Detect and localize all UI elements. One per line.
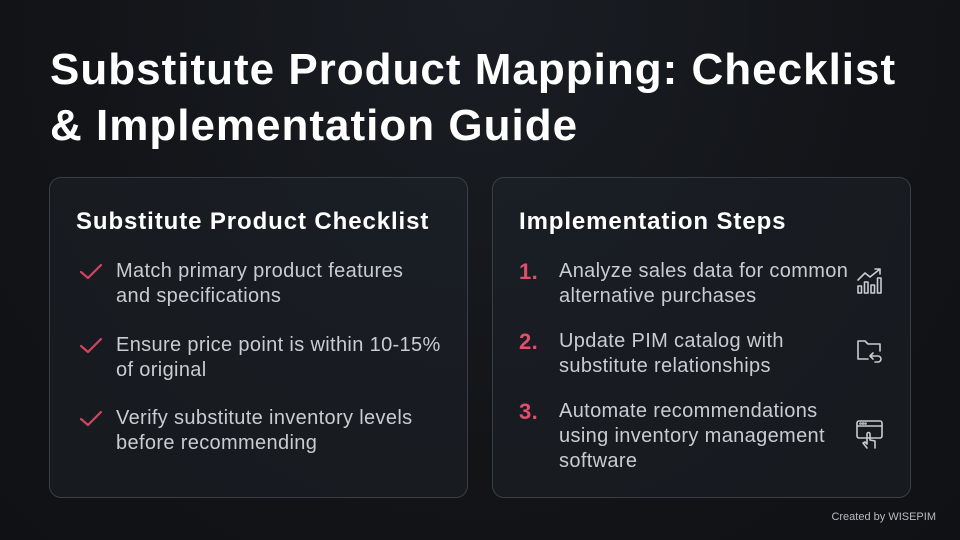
heading: checklist: Substitute Product Checklist xyxy=(76,208,429,235)
step 3: 3. xyxy=(519,399,538,424)
credit: Created by WISEPIM xyxy=(831,511,936,523)
panel: checklist xyxy=(49,177,468,498)
item 2: Ensure price point is within 10-15% xyxy=(116,334,441,356)
step 2: Update PIM catalog with xyxy=(559,330,784,352)
step 1 xyxy=(519,259,848,307)
step 1: Analyze sales data for common xyxy=(559,260,848,282)
item 3: Verify substitute inventory levels xyxy=(116,407,412,429)
item 2: of original xyxy=(116,359,207,381)
icon: click browser xyxy=(856,420,883,449)
panel: implementation steps xyxy=(492,177,911,498)
step 3: Automate recommendations xyxy=(559,400,818,422)
step 1: alternative purchases xyxy=(559,285,756,307)
item 1: and specifications xyxy=(116,285,281,307)
step 1: 1. xyxy=(519,259,538,284)
icon: chart xyxy=(857,268,882,294)
item 2 xyxy=(80,334,441,381)
step 3 xyxy=(519,399,825,472)
item 3: before recommending xyxy=(116,432,317,454)
step 3: software xyxy=(559,450,637,472)
title: Substitute Product Mapping: Checklist xyxy=(50,45,896,94)
step 2: substitute relationships xyxy=(559,355,771,377)
item 1: Match primary product features xyxy=(116,260,403,282)
item 3 xyxy=(80,407,412,454)
item 1 xyxy=(80,260,403,307)
step 3: using inventory management xyxy=(559,425,825,447)
step 2 xyxy=(519,329,784,377)
title xyxy=(50,45,896,150)
step 2: 2. xyxy=(519,329,538,354)
heading: steps: Implementation Steps xyxy=(519,208,786,235)
title: & Implementation Guide xyxy=(50,101,578,150)
icon: folder xyxy=(857,340,882,363)
